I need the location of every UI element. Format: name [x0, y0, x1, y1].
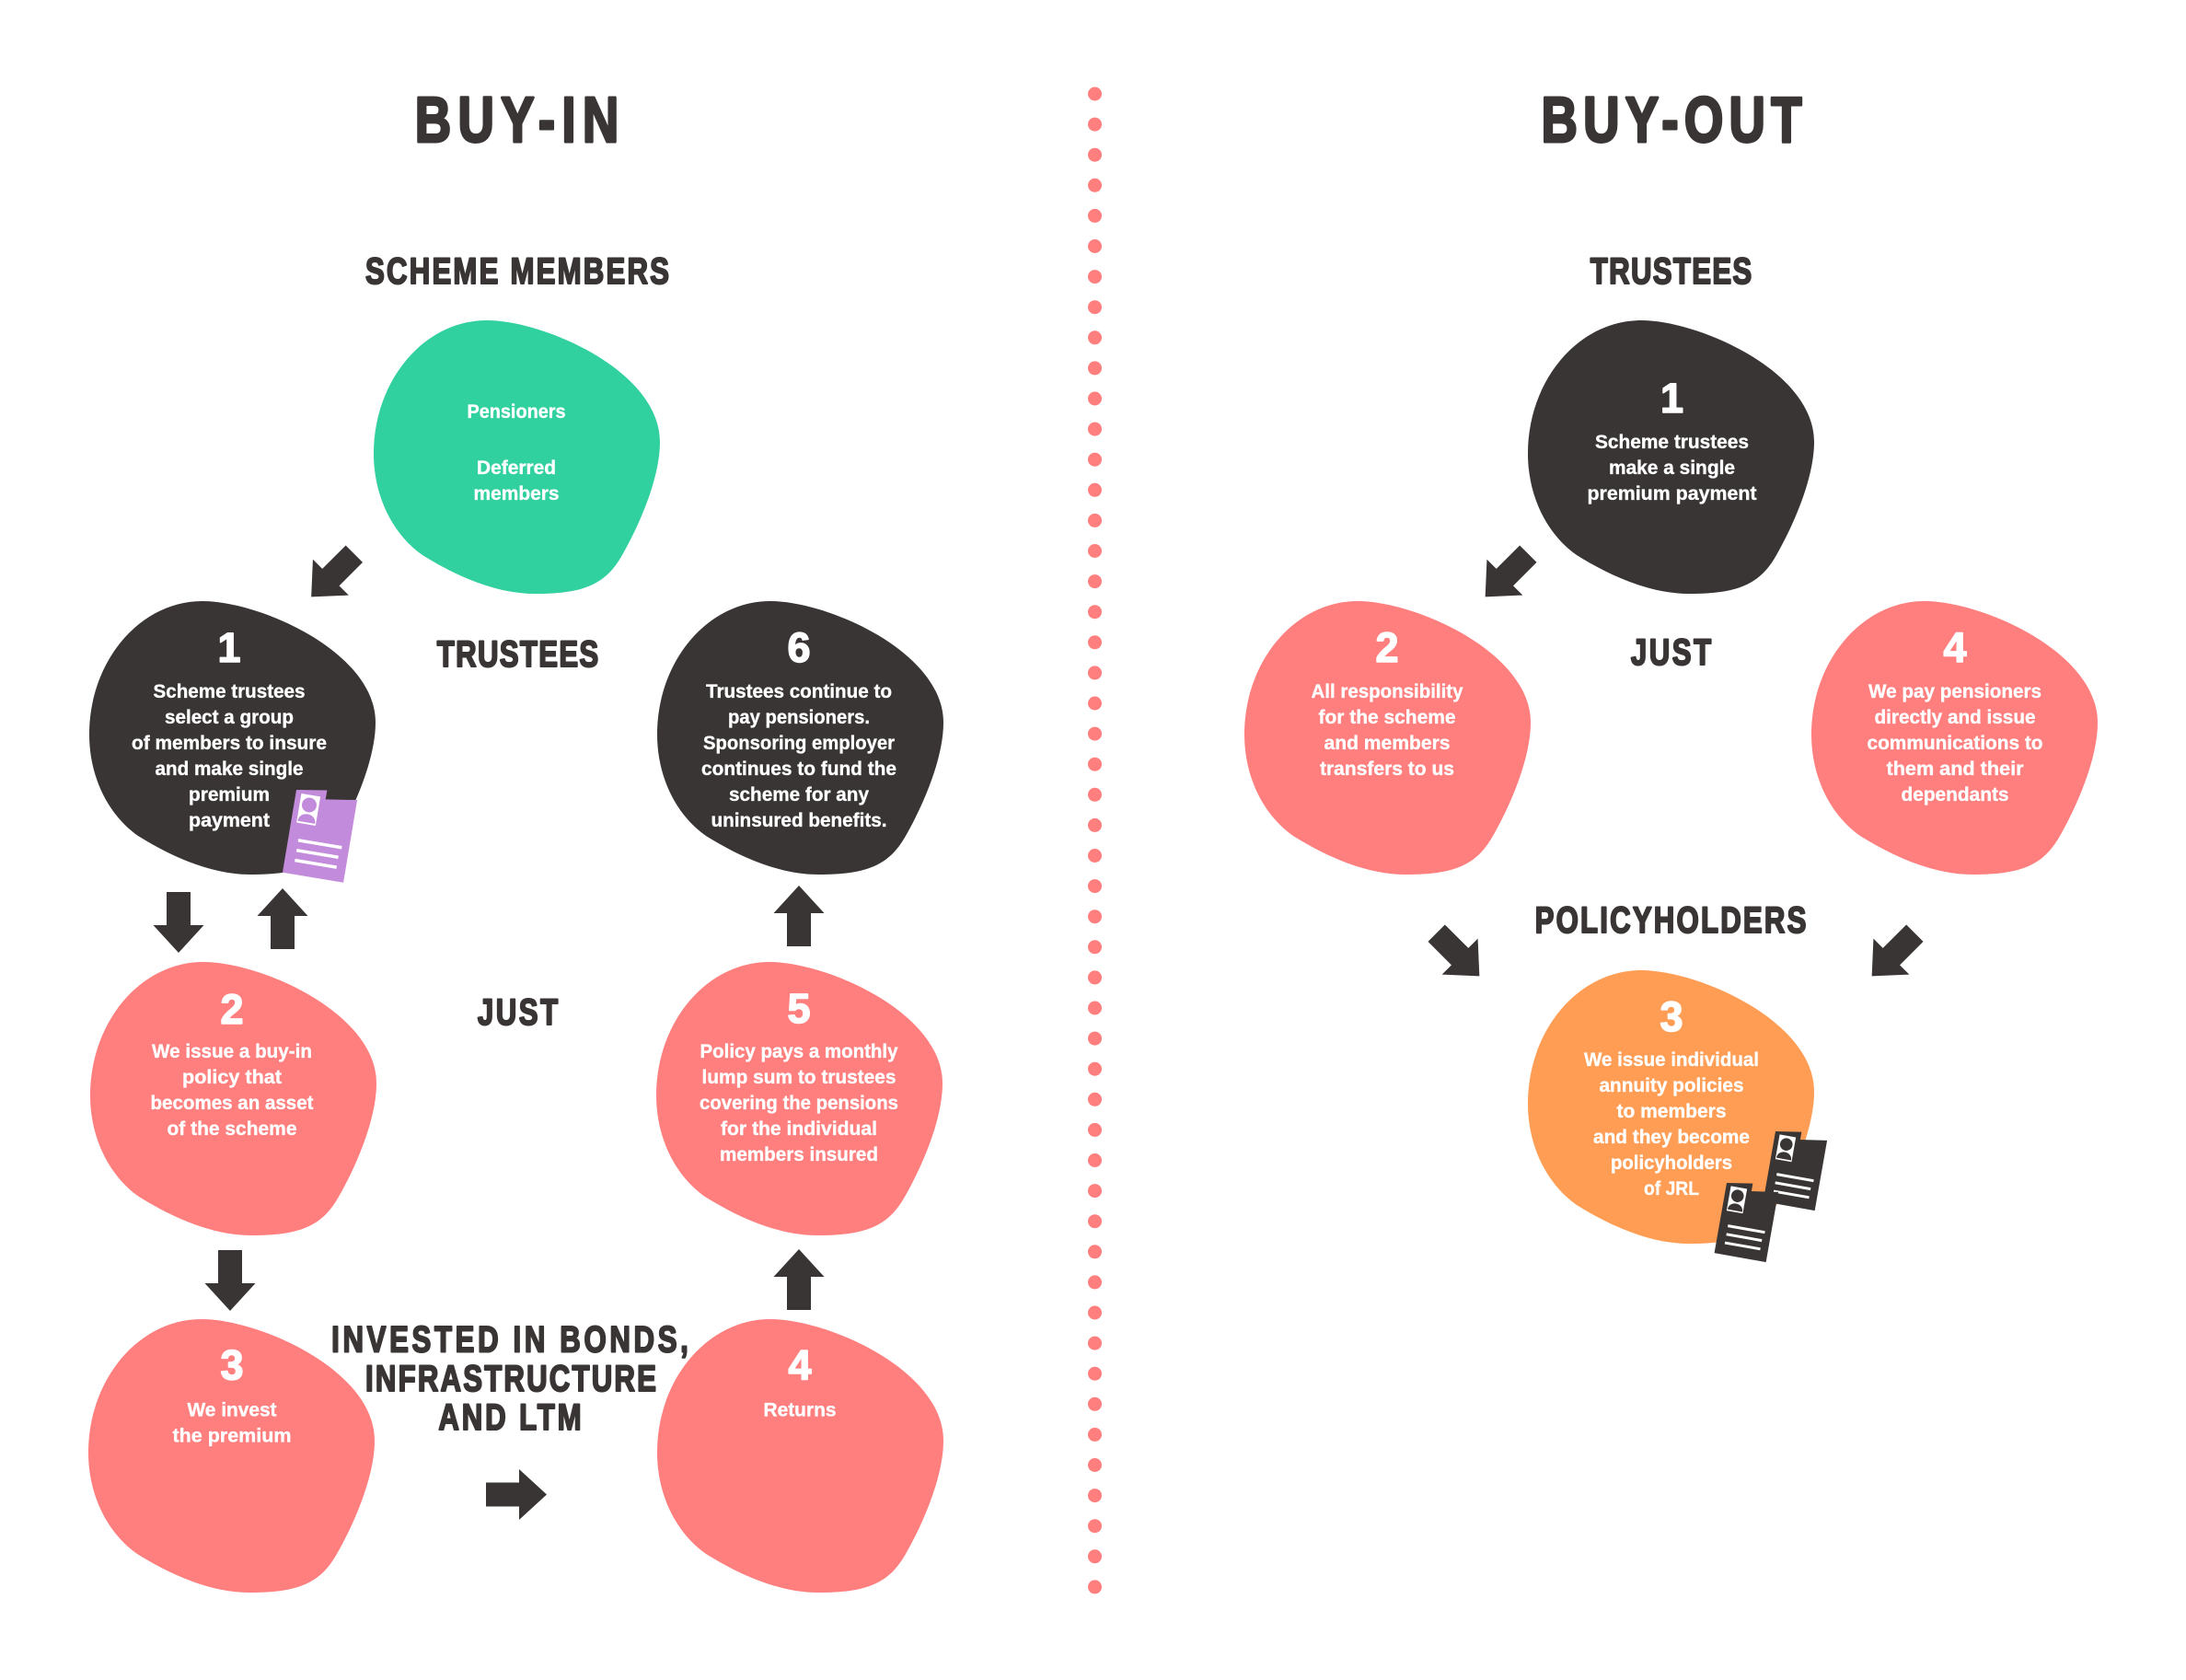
step 1: buy-in trustees: select a group	[165, 707, 294, 728]
step 6: trustees continue to pay: Trustees continue to	[706, 681, 892, 702]
step 6: trustees continue to pay: 6	[787, 624, 811, 671]
step 1: buy-in trustees: of members to insure	[132, 733, 327, 754]
buy-out step 3: individual annuity policies	[1528, 970, 1828, 1262]
step 6: trustees continue to pay: scheme for any	[729, 784, 869, 805]
step 5: policy pays monthly: for the individual	[721, 1118, 877, 1140]
step 1: buy-in trustees	[89, 601, 376, 883]
heading: policyholders: POLICYHOLDERS	[1535, 899, 1806, 941]
step 5: policy pays monthly: 5	[787, 985, 811, 1032]
arrow: step 2 to step 3 (buy-out)	[1418, 915, 1498, 994]
heading: trustees (buy-out): TRUSTEES	[1590, 250, 1752, 292]
step 2: buy-in policy	[90, 962, 376, 1235]
step 2: buy-in policy: of the scheme	[168, 1118, 296, 1140]
step 4: returns: 4	[788, 1342, 812, 1388]
step 1: buy-in trustees: premium	[189, 784, 270, 805]
step 2: buy-in policy: becomes an asset	[151, 1093, 313, 1114]
heading: invested in bonds, infrastructure and LTM: INFRASTRUCTURE	[365, 1358, 656, 1399]
buy-out step 2: responsibility transfers: All responsibility	[1311, 681, 1463, 702]
icon: purple policy document	[283, 785, 358, 883]
buy-out step 4: pay pensioners directly: We pay pensioners	[1868, 681, 2041, 702]
step 1: buy-in trustees: and make single	[155, 759, 304, 780]
buy-out step 3: individual annuity policies: and they become	[1593, 1127, 1750, 1148]
blob: pensioners and deferred members: Pensioners	[468, 401, 565, 423]
arrow: step 3 to step 4	[486, 1469, 547, 1520]
step 6: trustees continue to pay: continues to fund the	[701, 759, 896, 780]
step 6: trustees continue to pay: pay pensioners.	[728, 707, 870, 728]
icon: policy document upper	[1764, 1128, 1828, 1211]
heading: trustees: TRUSTEES	[437, 633, 598, 675]
arrow: step 4 to step 3 (buy-out)	[1854, 915, 1933, 994]
step 3: invest the premium	[88, 1319, 375, 1593]
step 2: buy-in policy: We issue a buy-in	[152, 1041, 312, 1062]
arrow: step 5 to step 6	[773, 886, 825, 946]
buy-out step 4: pay pensioners directly	[1811, 601, 2098, 875]
buy-out step 4: pay pensioners directly: them and their	[1887, 759, 2023, 780]
buy-out step 3: individual annuity policies: 3	[1660, 993, 1683, 1040]
step 1: buy-in trustees: payment	[189, 810, 270, 831]
buy-out step 3: individual annuity policies: of JRL	[1644, 1178, 1699, 1199]
heading: invested in bonds, infrastructure and LTM: INVESTED IN BONDS,	[331, 1319, 688, 1360]
buy-out step 2: responsibility transfers: transfers to us	[1320, 759, 1454, 780]
heading: scheme members: SCHEME MEMBERS	[365, 250, 669, 292]
step 2: buy-in policy: policy that	[182, 1067, 282, 1088]
blob: pensioners and deferred members: Deferred	[477, 458, 556, 479]
title: buy-out: BUY-OUT	[1541, 85, 1802, 156]
arrow: step 2 to step 3	[204, 1250, 256, 1311]
step 1: buy-in trustees: 1	[217, 624, 241, 671]
step 5: policy pays monthly: Policy pays a monthly	[700, 1041, 898, 1062]
buy-out step 3: individual annuity policies: to members	[1616, 1101, 1727, 1122]
arrow: step 2 up to trustees	[258, 888, 307, 949]
buy-out step 2: responsibility transfers	[1244, 601, 1531, 875]
step 3: invest the premium: the premium	[173, 1425, 291, 1447]
step 5: policy pays monthly: lump sum to trustees	[701, 1067, 896, 1088]
step 3: invest the premium: 3	[220, 1342, 244, 1388]
buy-out step 4: pay pensioners directly: directly and issue	[1874, 707, 2036, 728]
step 1: buy-in trustees: Scheme trustees	[153, 681, 306, 702]
step 3: invest the premium: We invest	[188, 1399, 276, 1421]
arrow: members to trustees	[294, 536, 372, 615]
buy-out step 4: pay pensioners directly: communications to	[1867, 733, 2043, 754]
step 6: trustees continue to pay: uninsured benefits.	[711, 810, 887, 831]
arrow: buy-out step 1 to step 2	[1467, 536, 1546, 615]
step 5: policy pays monthly	[656, 962, 943, 1235]
buy-out step 4: pay pensioners directly: dependants	[1902, 784, 2008, 805]
blob: pensioners and deferred members	[374, 320, 660, 594]
heading: invested in bonds, infrastructure and LTM	[331, 1319, 688, 1438]
arrow: step 4 to step 5	[773, 1249, 825, 1310]
step 5: policy pays monthly: covering the pensions	[700, 1093, 898, 1114]
buy-out step 3: individual annuity policies: We issue individual	[1584, 1049, 1759, 1071]
step 6: trustees continue to pay: Sponsoring employer	[703, 733, 895, 754]
arrow: trustees down to step 2	[153, 892, 204, 953]
buy-out step 1: single premium: make a single	[1609, 458, 1735, 479]
buy-out step 1: single premium: Scheme trustees	[1595, 432, 1749, 453]
step 6: trustees continue to pay	[657, 601, 943, 875]
buy-out step 1: single premium: premium payment	[1587, 483, 1756, 504]
heading: just (buy-out): JUST	[1631, 631, 1711, 673]
step 5: policy pays monthly: members insured	[720, 1144, 878, 1165]
buy-out step 1: single premium	[1528, 320, 1814, 594]
buy-out step 3: individual annuity policies: policyholders	[1611, 1153, 1732, 1174]
icon: policy document lower	[1715, 1179, 1779, 1262]
buy-out step 4: pay pensioners directly: 4	[1943, 624, 1967, 671]
heading: invested in bonds, infrastructure and LTM: AND LTM	[438, 1396, 582, 1438]
step 4: returns: Returns	[764, 1399, 836, 1421]
buy-out step 3: individual annuity policies: annuity policies	[1600, 1075, 1743, 1096]
buy-out step 2: responsibility transfers: for the scheme	[1318, 707, 1456, 728]
buy-out step 2: responsibility transfers: 2	[1375, 624, 1399, 671]
step 2: buy-in policy: 2	[220, 986, 244, 1033]
blob: pensioners and deferred members: members	[473, 483, 560, 504]
title: buy-in: BUY-IN	[415, 85, 619, 156]
heading: just (buy-in): JUST	[478, 991, 558, 1033]
step 4: returns	[657, 1319, 943, 1593]
buy-out step 1: single premium: 1	[1660, 375, 1683, 422]
buy-out step 2: responsibility transfers: and members	[1324, 733, 1451, 754]
